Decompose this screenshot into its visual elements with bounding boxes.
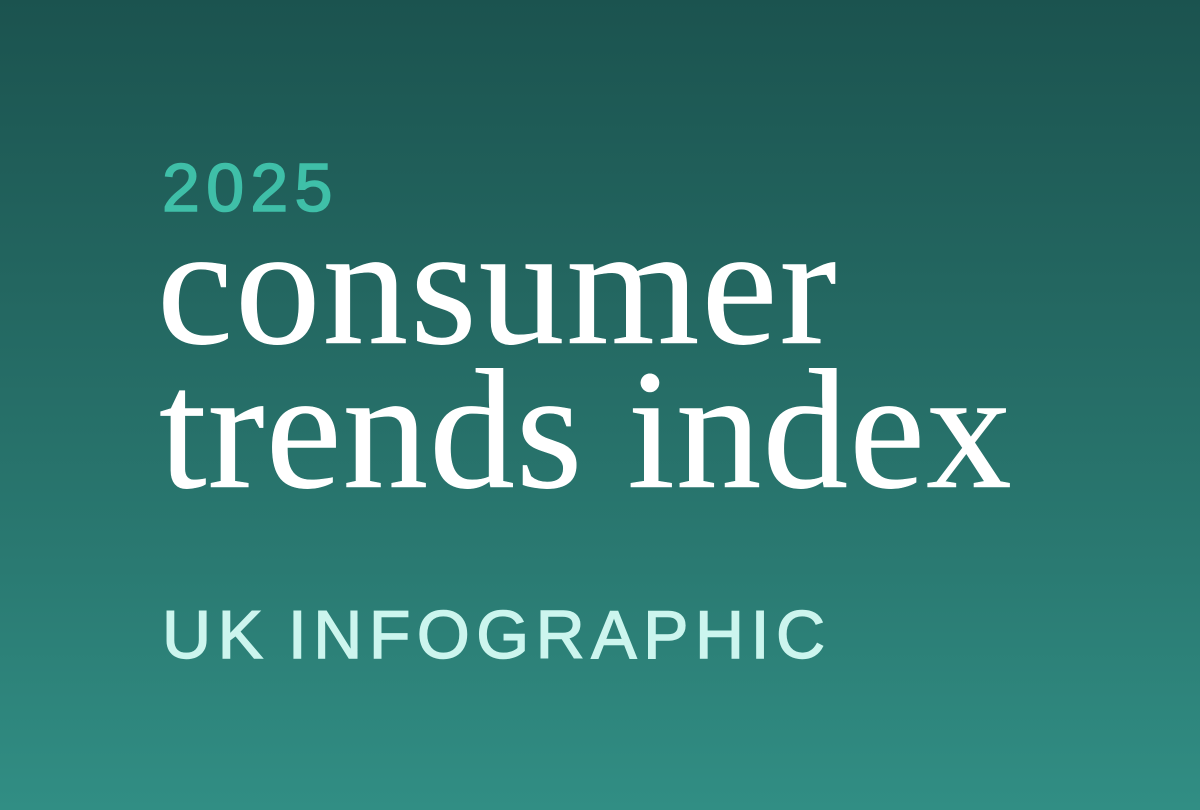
subtitle: UK INFOGRAPHIC — [162, 597, 832, 673]
year label: 2025 — [162, 150, 339, 226]
title line two: trends index — [159, 335, 1013, 524]
title line one: consumer — [157, 191, 839, 380]
